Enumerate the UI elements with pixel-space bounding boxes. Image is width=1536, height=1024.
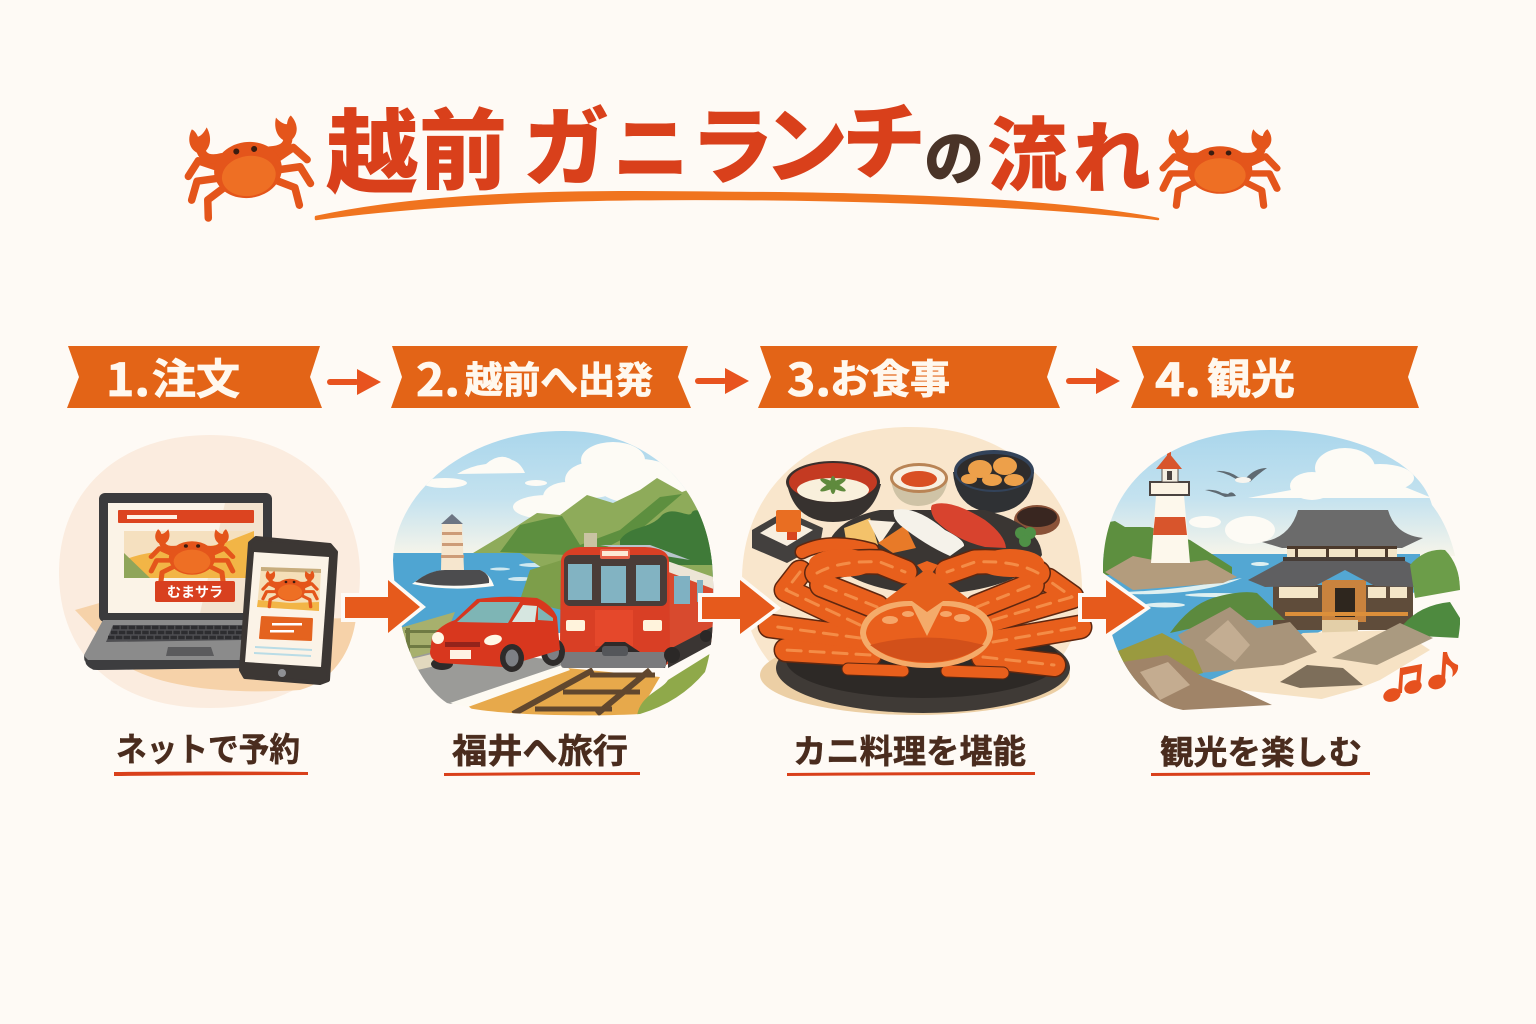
banner 1 bbox=[67, 344, 322, 409]
banner 2: 越前へ出発 bbox=[465, 350, 653, 404]
square dish bbox=[752, 510, 823, 563]
hills bbox=[473, 478, 716, 580]
clouds bbox=[423, 442, 702, 519]
foreground rocks bbox=[1113, 592, 1433, 710]
ground and track bbox=[467, 668, 660, 716]
arrow 1 to 2 bbox=[327, 369, 381, 395]
bowl with vegetables bbox=[953, 450, 1034, 513]
icon: music notes bbox=[1381, 652, 1458, 704]
icon: laptop bbox=[84, 493, 272, 670]
panel background blob bbox=[59, 435, 360, 708]
icon: car bbox=[430, 597, 565, 672]
caption 1: ネットで予約 bbox=[116, 723, 300, 771]
bowl with tofu bbox=[786, 461, 881, 522]
sand bbox=[1210, 630, 1430, 700]
title text: 前 bbox=[419, 81, 507, 208]
desk shape bbox=[75, 600, 356, 691]
title text: ニ bbox=[613, 88, 689, 198]
banner 1: 注文 bbox=[152, 346, 240, 407]
fence and grass bbox=[402, 612, 455, 658]
icon: lighthouse on rock bbox=[412, 514, 494, 589]
banner 4 bbox=[1131, 344, 1419, 409]
step banners row bbox=[67, 344, 1419, 409]
icon: shrine building bbox=[1248, 510, 1438, 633]
panel: crab meal bbox=[742, 427, 1082, 715]
large arrow 3 bbox=[1078, 572, 1151, 642]
icon: train bbox=[560, 545, 716, 668]
title text: ラ bbox=[690, 81, 774, 202]
arrow 2 to 3 bbox=[695, 368, 749, 394]
title text: の bbox=[924, 111, 984, 198]
banner 4: 4. bbox=[1155, 344, 1201, 409]
arrow 3 to 4 bbox=[1066, 368, 1120, 394]
title underline bbox=[316, 192, 1158, 219]
title text: れ bbox=[1073, 97, 1151, 209]
icon: seagulls bbox=[1205, 468, 1267, 497]
caption 4: 観光を楽しむ bbox=[1160, 726, 1362, 774]
banner 2: 2. bbox=[416, 344, 460, 409]
clouds bbox=[1189, 448, 1432, 544]
left headland bbox=[1103, 521, 1237, 590]
sauce bowl bbox=[890, 463, 948, 506]
sky bbox=[394, 431, 698, 553]
banner 3 bbox=[758, 344, 1060, 409]
panel: sightseeing coast bbox=[1100, 428, 1465, 710]
icon: right crab bbox=[1163, 129, 1277, 206]
caption 3: カニ料理を堪能 bbox=[793, 725, 1026, 773]
title text: ガ bbox=[523, 78, 609, 203]
title bbox=[182, 76, 1277, 220]
title text: ン bbox=[764, 80, 848, 201]
title text bbox=[326, 76, 1151, 213]
banner 3: お食事 bbox=[830, 347, 950, 405]
banner 4: 観光 bbox=[1207, 346, 1295, 407]
title text: 越 bbox=[326, 80, 418, 213]
sea bbox=[1100, 554, 1420, 700]
panel: online order illustration bbox=[59, 435, 360, 708]
panel: train and car coast bbox=[390, 428, 716, 716]
sky bbox=[1100, 428, 1465, 556]
icon: tablet bbox=[241, 538, 336, 683]
banner 3: 3. bbox=[787, 344, 831, 409]
road bbox=[410, 652, 561, 704]
banner 1: 1. bbox=[106, 344, 150, 409]
caption 2: 福井へ旅行 bbox=[452, 724, 628, 773]
icon: snow crab bbox=[770, 544, 1080, 673]
icon: left crab bbox=[182, 114, 313, 220]
bushes right bbox=[1403, 550, 1460, 638]
title text: 流 bbox=[987, 92, 1067, 208]
large arrow 1 bbox=[341, 572, 426, 640]
serving plate bbox=[776, 622, 1070, 713]
wooden table bbox=[742, 427, 1082, 715]
table shadow bbox=[760, 635, 1070, 715]
sashimi platter bbox=[825, 503, 1042, 595]
icon: lighthouse bbox=[1150, 450, 1190, 563]
sea bbox=[390, 553, 716, 633]
icon: laptop: むまサラ bbox=[167, 582, 223, 602]
banner 2 bbox=[391, 344, 691, 409]
title text: チ bbox=[842, 76, 926, 197]
large arrow 2 bbox=[698, 572, 781, 642]
small sauce dish bbox=[1014, 505, 1060, 535]
